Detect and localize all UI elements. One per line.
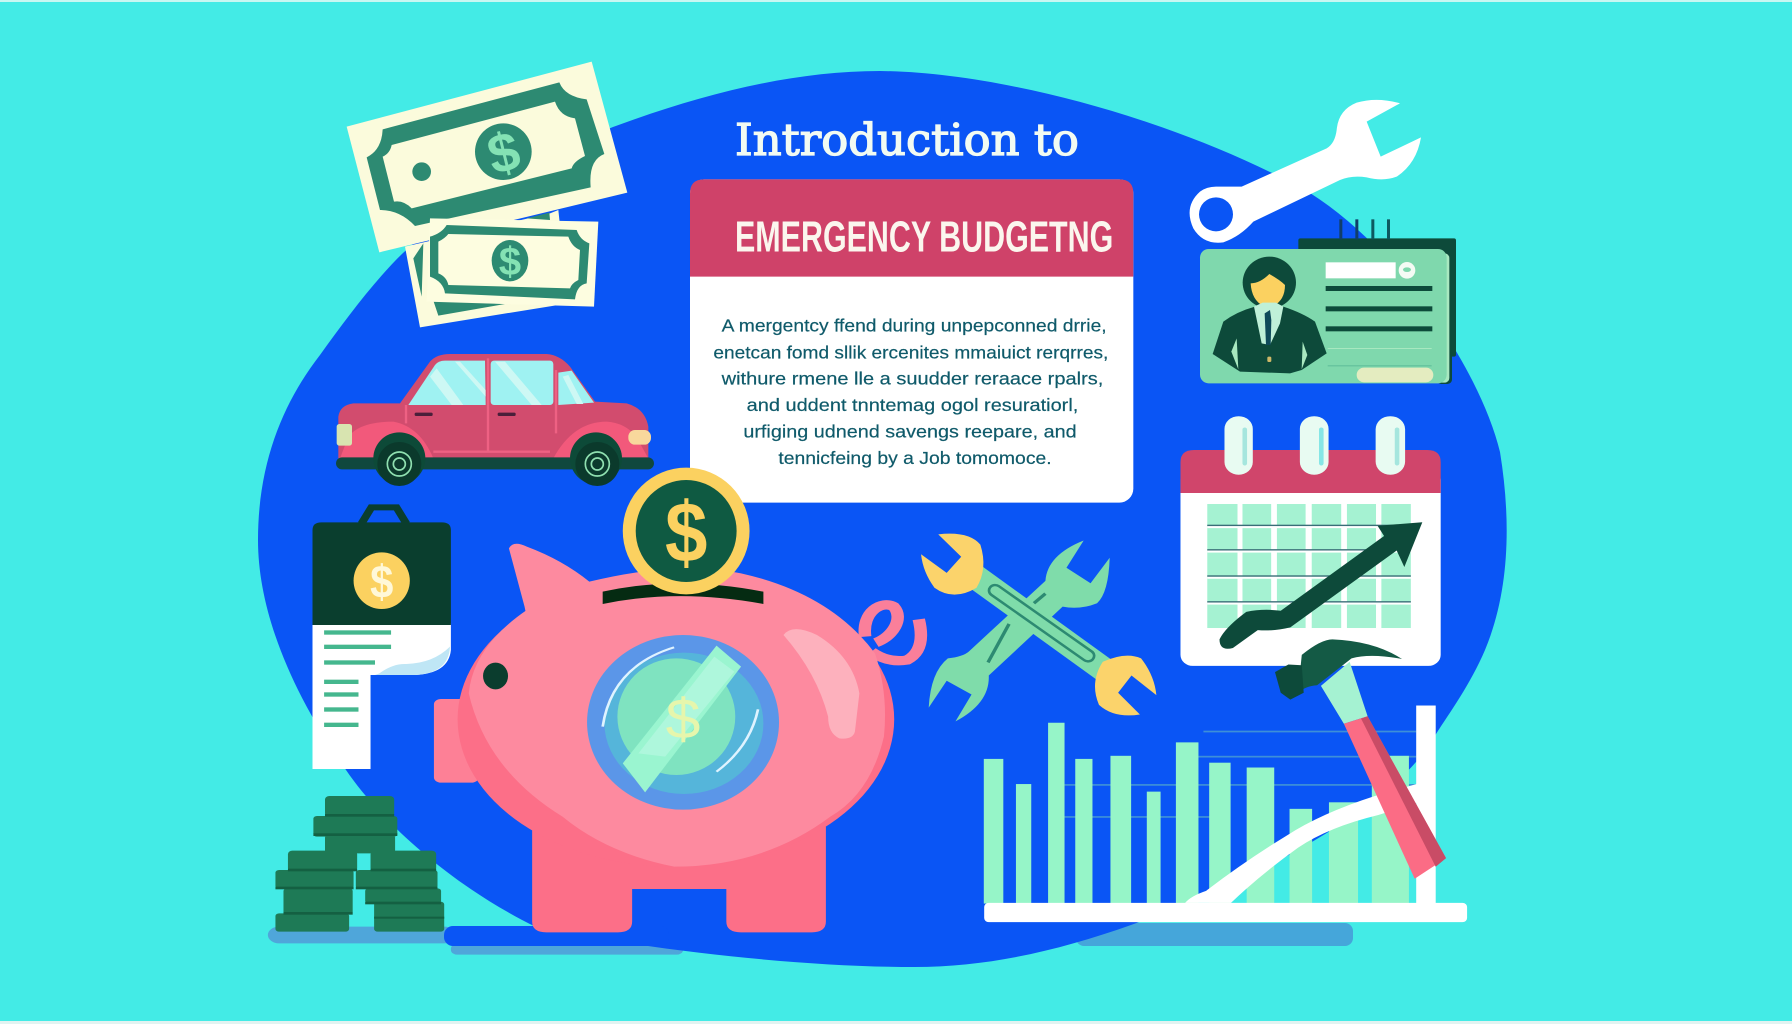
hammer head — [1298, 639, 1402, 693]
falling coin — [623, 468, 750, 594]
person portrait — [1213, 257, 1327, 373]
wheels — [373, 432, 425, 484]
icon: white wrench — [1190, 100, 1421, 243]
card face — [1200, 249, 1447, 383]
front bill — [427, 218, 598, 307]
heading: Emergency Budgeting: EMERGENCY BUDGETNG — [735, 214, 1113, 262]
date grid — [1207, 504, 1411, 628]
body paragraph: and uddent tnntemag ogol resuratiorl, — [747, 395, 1078, 415]
card text lines — [1326, 262, 1396, 278]
blue central blob — [258, 71, 1507, 967]
falling coin: $ — [665, 486, 707, 580]
glass window with savings — [587, 635, 779, 810]
receipt lines — [324, 630, 391, 727]
wallet body — [313, 522, 451, 625]
calendar page — [1180, 469, 1441, 666]
yellow-headed wrench — [967, 564, 1114, 684]
body paragraph: withure rmene lle a suudder reraace rpalrs, — [721, 368, 1103, 388]
receipt paper — [313, 623, 451, 769]
bars — [984, 723, 1409, 904]
body paragraph: tennicfeing by a Job tomomoce. — [778, 448, 1052, 468]
green wrench — [929, 541, 1110, 721]
glass window with savings: $ — [666, 688, 700, 751]
card holder back — [1298, 238, 1456, 357]
icon: coin stacks — [275, 796, 444, 932]
grid lines — [1065, 731, 1416, 818]
pig body — [458, 572, 894, 867]
icon: crossed wrenches — [921, 534, 1156, 721]
rear bill — [405, 210, 568, 327]
coin stack and piggy ground shadow — [268, 927, 683, 955]
coin slot — [603, 583, 763, 604]
icon: hammer — [1275, 639, 1446, 879]
icon: dollar bills: $ — [499, 240, 521, 284]
tail — [865, 605, 921, 661]
panel body — [690, 179, 1133, 503]
shine — [783, 629, 859, 739]
lights — [337, 424, 352, 446]
body paragraph: enetcan fomd sllik ercenites mmaiuict rerqrres, — [713, 342, 1108, 362]
snout — [434, 699, 479, 783]
binder rings — [1224, 416, 1253, 475]
panel header band — [690, 179, 1133, 277]
eye — [483, 663, 508, 689]
chart ground shadow — [1076, 923, 1353, 946]
hammer handle — [1321, 662, 1368, 724]
rising arrow — [1220, 522, 1422, 649]
title and text panel — [690, 115, 1133, 503]
bar chart — [984, 706, 1467, 922]
horizontal axis — [984, 903, 1467, 922]
ground pedestal — [444, 926, 669, 946]
body paragraph: urfiging udnend savengs reepare, and — [743, 422, 1077, 442]
large bill — [347, 62, 627, 252]
icon: calendar with rising arrow — [1180, 416, 1441, 666]
car body — [338, 354, 648, 458]
trend curve — [1185, 784, 1417, 903]
body highlight — [469, 568, 885, 867]
vertical axis — [1416, 706, 1436, 912]
icon: wallet with receipt: $ — [370, 555, 393, 608]
body paragraph: A mergentcy ffend during unpepconned drrie, — [722, 316, 1107, 336]
doors — [406, 358, 556, 452]
windows — [408, 361, 486, 405]
calendar header — [1180, 450, 1441, 493]
icon: ID card — [1200, 219, 1456, 384]
legs — [532, 827, 826, 932]
title: Introduction to: Introduction to — [735, 115, 1079, 166]
wallet handle — [362, 507, 406, 523]
wallet coin — [354, 552, 410, 609]
icon: dollar bills — [347, 62, 627, 327]
icon: red car — [336, 354, 654, 486]
piggy bank — [434, 468, 921, 932]
bumper — [336, 457, 654, 469]
icon: dollar bills: $ — [481, 119, 526, 186]
icon: wallet with receipt — [313, 507, 451, 769]
ear — [509, 544, 589, 647]
body paragraph — [713, 316, 1108, 468]
